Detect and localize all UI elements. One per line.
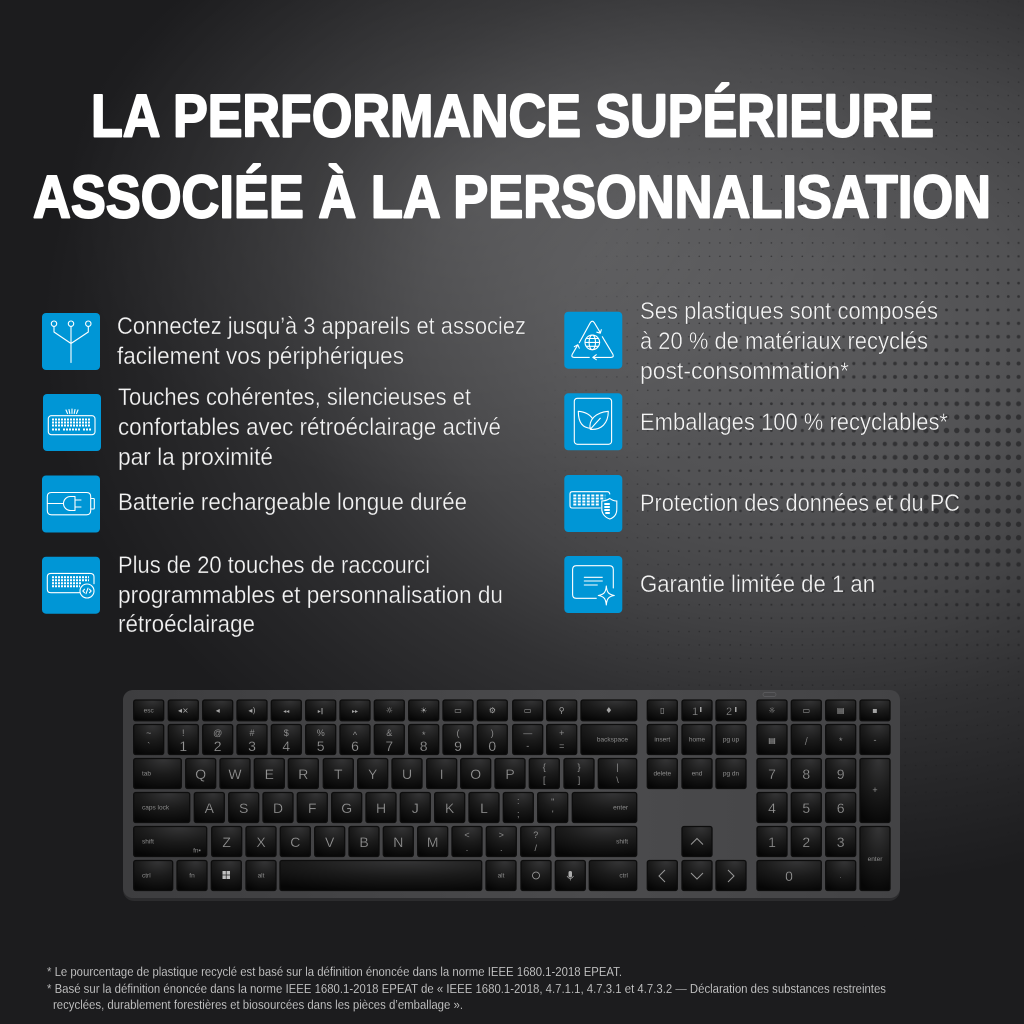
home key row: " (551, 797, 554, 807)
number key row: % (317, 728, 325, 738)
QWERTY key row: } (577, 762, 581, 772)
QWERTY key row: \ (616, 775, 619, 785)
shift key row: C (290, 834, 300, 850)
text: recyclable packaging: Emballages 100 % recyclables* (640, 409, 948, 436)
bottom key row (134, 860, 856, 890)
home key row: A (205, 800, 215, 816)
number key row: ^ (353, 730, 358, 740)
number key row: 1 (179, 738, 187, 754)
function key row: ▭ (524, 706, 531, 715)
function key row: ▸▸ (352, 708, 358, 715)
shift key row: 2 (802, 834, 810, 850)
icon: battery with plug (42, 476, 100, 532)
number key row: 6 (351, 738, 359, 754)
text: backlit keys (118, 384, 501, 471)
function key row: 2 (726, 706, 732, 718)
number key row: home (689, 736, 706, 744)
icon: leaves on package (564, 393, 622, 450)
QWERTY key row: E (265, 766, 274, 782)
home key row: enter (613, 804, 629, 812)
text: data protection: Protection des données et du PC (640, 490, 960, 517)
number key row: ~ (146, 728, 151, 738)
icon: three-device connection (42, 313, 100, 370)
number key row: * (422, 730, 426, 740)
text: programmable shortcuts: rétroéclairage (118, 611, 255, 638)
footnotes: * Basé sur la définition énoncée dans la norme IEEE 1680.1-2018 EPEAT de « IEEE 1680.1-2018, 4.7.1.1, 4.7.3.1 et 4.7.3.2 — Déclaration des substances restreintes (47, 982, 886, 996)
function key row (134, 700, 890, 721)
number key row: — (523, 728, 532, 738)
QWERTY key row: | (616, 762, 619, 772)
function key row: ⚙ (489, 706, 496, 715)
shift key row: shift (142, 838, 154, 846)
text: recycled plastics: à 20 % de matériaux recyclés (640, 328, 928, 355)
function key row: ▸‖ (318, 708, 324, 715)
QWERTY key row: 7 (768, 766, 776, 782)
number key row: - (526, 741, 529, 751)
shift key row: ? (533, 830, 538, 840)
text: connect devices: Connectez jusqu’à 3 appareils et associez (117, 313, 526, 340)
number key row: = (559, 741, 564, 751)
QWERTY key row: + (872, 785, 878, 795)
number key row: insert (654, 736, 670, 744)
icon: recycling triangle with globe (564, 312, 622, 369)
text: programmable shortcuts: programmables et personnalisation du (118, 582, 503, 609)
bottom key row: fn (189, 872, 195, 880)
icon: keyboard with shield (564, 475, 622, 532)
number key row: @ (213, 728, 222, 738)
QWERTY key row: 9 (837, 766, 845, 782)
QWERTY key row: W (228, 766, 242, 782)
function key row: ⚲ (559, 706, 565, 715)
shift key row: . (500, 843, 503, 853)
function key row: 1 (692, 706, 698, 718)
number key row: ! (182, 728, 185, 738)
number key row: 0 (488, 738, 496, 754)
feature: data protection (564, 475, 960, 532)
keyboard (123, 690, 900, 901)
shift key row: 1 (768, 834, 776, 850)
text: limited warranty: Garantie limitée de 1 an (640, 571, 875, 598)
QWERTY key row: O (470, 766, 481, 782)
home key row: G (341, 800, 352, 816)
QWERTY key row (134, 758, 890, 822)
number key row: 2 (214, 738, 222, 754)
home key row: S (239, 800, 248, 816)
text: recycled plastics: Ses plastiques sont composés (640, 298, 938, 325)
home key row: ' (552, 809, 554, 819)
icon: warranty card with sparkle (564, 556, 622, 613)
QWERTY key row: pg dn (723, 770, 740, 778)
shift key row: B (359, 834, 369, 850)
function key row: esc (144, 708, 155, 714)
number key row: 3 (248, 738, 256, 754)
shift key row: . (466, 843, 468, 853)
shift key row: 3 (837, 834, 845, 850)
shift key row: Z (222, 834, 231, 850)
number key row: $ (284, 728, 289, 738)
feature: rechargeable battery (42, 476, 467, 532)
QWERTY key row: end (692, 770, 703, 778)
number key row: 8 (420, 738, 428, 754)
number key row: 7 (385, 738, 393, 754)
home key row: 6 (837, 800, 845, 816)
home key row: 5 (802, 800, 810, 816)
number key row: + (559, 728, 564, 738)
footnotes: recyclées, durablement forestières et biosourcées dans les pièces d’emballage ». (53, 998, 463, 1012)
feature: programmable shortcuts (42, 552, 503, 638)
QWERTY key row: { (543, 762, 546, 772)
shift key row: / (534, 843, 537, 853)
shift key row (134, 826, 890, 890)
number key row: pg up (723, 736, 740, 744)
QWERTY key row: ] (578, 775, 580, 785)
home key row: ; (517, 809, 520, 819)
feature: backlit keys (43, 384, 501, 471)
shift key row: shift (616, 838, 628, 846)
number key row: & (386, 728, 392, 738)
text: connect devices (117, 313, 526, 370)
feature: recycled plastics (564, 298, 938, 385)
number key row (134, 724, 890, 754)
function key row: ☼ (768, 706, 776, 715)
QWERTY key row: delete (653, 770, 672, 778)
bottom key row: ctrl (619, 872, 629, 880)
number key row: # (249, 728, 255, 738)
background dot pattern (575, 42, 1022, 752)
function key row: ▯ (660, 706, 665, 715)
home key row: H (376, 800, 386, 816)
function key row: ▪ (872, 706, 878, 715)
text: backlit keys: Touches cohérentes, silencieuses et (118, 384, 471, 411)
feature: limited warranty (564, 556, 875, 613)
feature: connect devices (42, 313, 526, 370)
home key row: 4 (768, 800, 776, 816)
function key row: ◂◂ (283, 708, 289, 715)
shift key row: M (427, 834, 439, 850)
number key row: ▤ (768, 736, 776, 745)
shift key row: X (256, 834, 266, 850)
function key row: ◂) (248, 706, 256, 715)
home key row: K (445, 800, 455, 816)
number key row: 4 (282, 738, 290, 754)
bottom key row: ctrl (142, 872, 151, 880)
text: rechargeable battery: Batterie rechargeable longue durée (118, 489, 467, 516)
home key row: L (480, 800, 488, 816)
shift key row: < (464, 830, 470, 840)
number key row: backspace (597, 736, 628, 744)
number key row: * (839, 736, 843, 746)
footnotes: * Le pourcentage de plastique recyclé est basé sur la définition énoncée dans la norme IEEE 1680.1-2018 EPEAT. (47, 965, 622, 979)
function key row: ▭ (454, 706, 462, 715)
QWERTY key row: R (298, 766, 308, 782)
shift key row: enter (868, 856, 883, 863)
home key row: D (273, 800, 283, 816)
QWERTY key row: [ (543, 775, 546, 785)
shift key row: N (393, 834, 403, 850)
number key row: ) (491, 728, 494, 738)
footnotes (47, 965, 886, 1012)
text: backlit keys: par la proximité (118, 444, 273, 471)
number key row: ` (147, 741, 150, 751)
function key row: ▤ (837, 706, 844, 715)
function key row: ♦ (605, 706, 612, 715)
bottom key row: alt (258, 872, 265, 880)
home key row: caps lock (142, 804, 170, 812)
QWERTY key row: 8 (802, 766, 810, 782)
icon: backlit keyboard (43, 394, 101, 451)
QWERTY key row: Y (368, 766, 378, 782)
number key row: - (874, 735, 876, 745)
text: programmable shortcuts: Plus de 20 touches de raccourci (118, 552, 430, 579)
function key row: ☀ (420, 706, 427, 715)
shift key row: fn▪ (193, 848, 201, 854)
QWERTY key row: U (402, 766, 412, 782)
text: recycled plastics (640, 298, 938, 385)
icon: keyboard with code badge (42, 557, 100, 614)
bottom key row: 0 (785, 868, 793, 884)
QWERTY key row: Q (195, 766, 206, 782)
bottom key row: alt (498, 872, 505, 880)
QWERTY key row: tab (142, 770, 151, 778)
home key row: F (308, 800, 317, 816)
number key row: ( (456, 728, 460, 738)
shift key row: V (325, 834, 335, 850)
shift key row: > (499, 830, 504, 840)
QWERTY key row: T (334, 766, 343, 782)
text: programmable shortcuts (118, 552, 503, 638)
text: backlit keys: confortables avec rétroéclairage activé (118, 414, 501, 441)
text: recycled plastics: post-consommation* (640, 358, 849, 385)
function key row: ◂× (178, 706, 189, 715)
home key row (134, 792, 856, 822)
function key row: ☼ (386, 706, 393, 715)
keyboard body (123, 690, 900, 901)
number key row: / (805, 736, 809, 748)
feature: recyclable packaging (564, 393, 948, 450)
home key row: : (517, 796, 520, 806)
title (33, 82, 991, 230)
text: connect devices: facilement vos périphériques (117, 343, 404, 370)
home key row: J (412, 800, 419, 816)
QWERTY key row: I (440, 766, 444, 782)
QWERTY key row: P (505, 766, 515, 782)
function key row: ▭ (803, 706, 810, 715)
bottom key row: . (840, 873, 842, 880)
number key row: 9 (454, 738, 462, 754)
number key row: 5 (317, 738, 325, 754)
function key row: ◂ (216, 706, 220, 715)
